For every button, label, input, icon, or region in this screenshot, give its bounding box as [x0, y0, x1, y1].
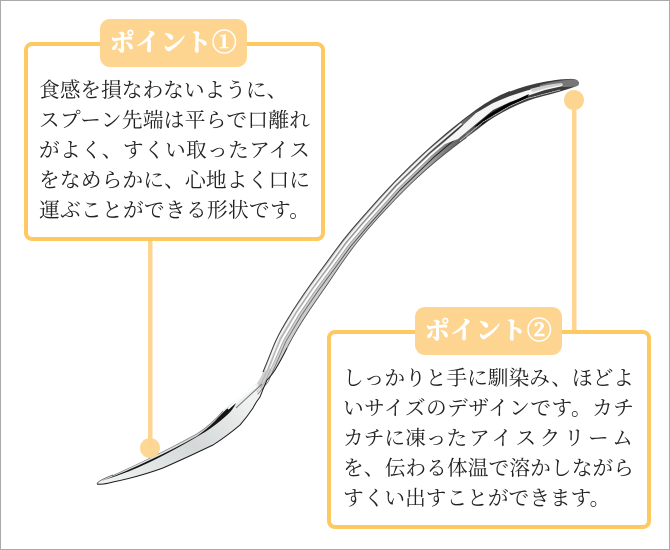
- thin line along lower band: [460, 90, 560, 141]
- heading: point 2: ポイント②: [425, 318, 552, 345]
- panel: point 1: [24, 42, 325, 241]
- bowl top reflection: [101, 403, 236, 481]
- handle upper end, dark base: [425, 79, 579, 171]
- spoon silhouette: [97, 79, 579, 484]
- white band at handle end: [440, 83, 563, 146]
- black reflection: [474, 94, 529, 127]
- point 1 body text: スプーン先端は平らで口離れ: [39, 110, 310, 132]
- connector line: point 1: [140, 238, 160, 458]
- point 2 body text: しっかりと手に馴染み、ほどよ: [343, 368, 634, 390]
- point 2 body text: いサイズのデザインです。カチ: [343, 398, 634, 420]
- spoon: [97, 79, 579, 484]
- point 1 body text: がよく、すくい取ったアイス: [39, 140, 310, 162]
- point 2 body text: を、伝わる体温で溶かしながら: [343, 458, 634, 480]
- handle tip: [540, 79, 579, 88]
- point 2 body text: カチに凍ったアイスクリーム: [343, 428, 636, 450]
- point 1 body text: [39, 79, 310, 222]
- bowl bottom edge: [97, 348, 287, 484]
- handle shading: [257, 123, 466, 390]
- handle dark stripes: [256, 125, 462, 390]
- panel: point 2: [327, 330, 651, 529]
- heading: point 1: ポイント①: [110, 30, 237, 57]
- point 1 body text: 運ぶことができる形状です。: [39, 200, 310, 222]
- point 2 body text: すくい出すことができます。: [343, 488, 610, 510]
- handle edges: [263, 92, 510, 372]
- point 1 body text: をなめらかに、心地よく口に: [39, 170, 310, 192]
- point 1 body text: 食感を損なわないように、: [39, 80, 287, 102]
- point 2 body text: [343, 368, 636, 510]
- handle white stripes: [266, 124, 461, 370]
- heading: point 2: [415, 307, 562, 355]
- connector line: point 2: [564, 90, 584, 333]
- heading: point 1: [100, 19, 247, 67]
